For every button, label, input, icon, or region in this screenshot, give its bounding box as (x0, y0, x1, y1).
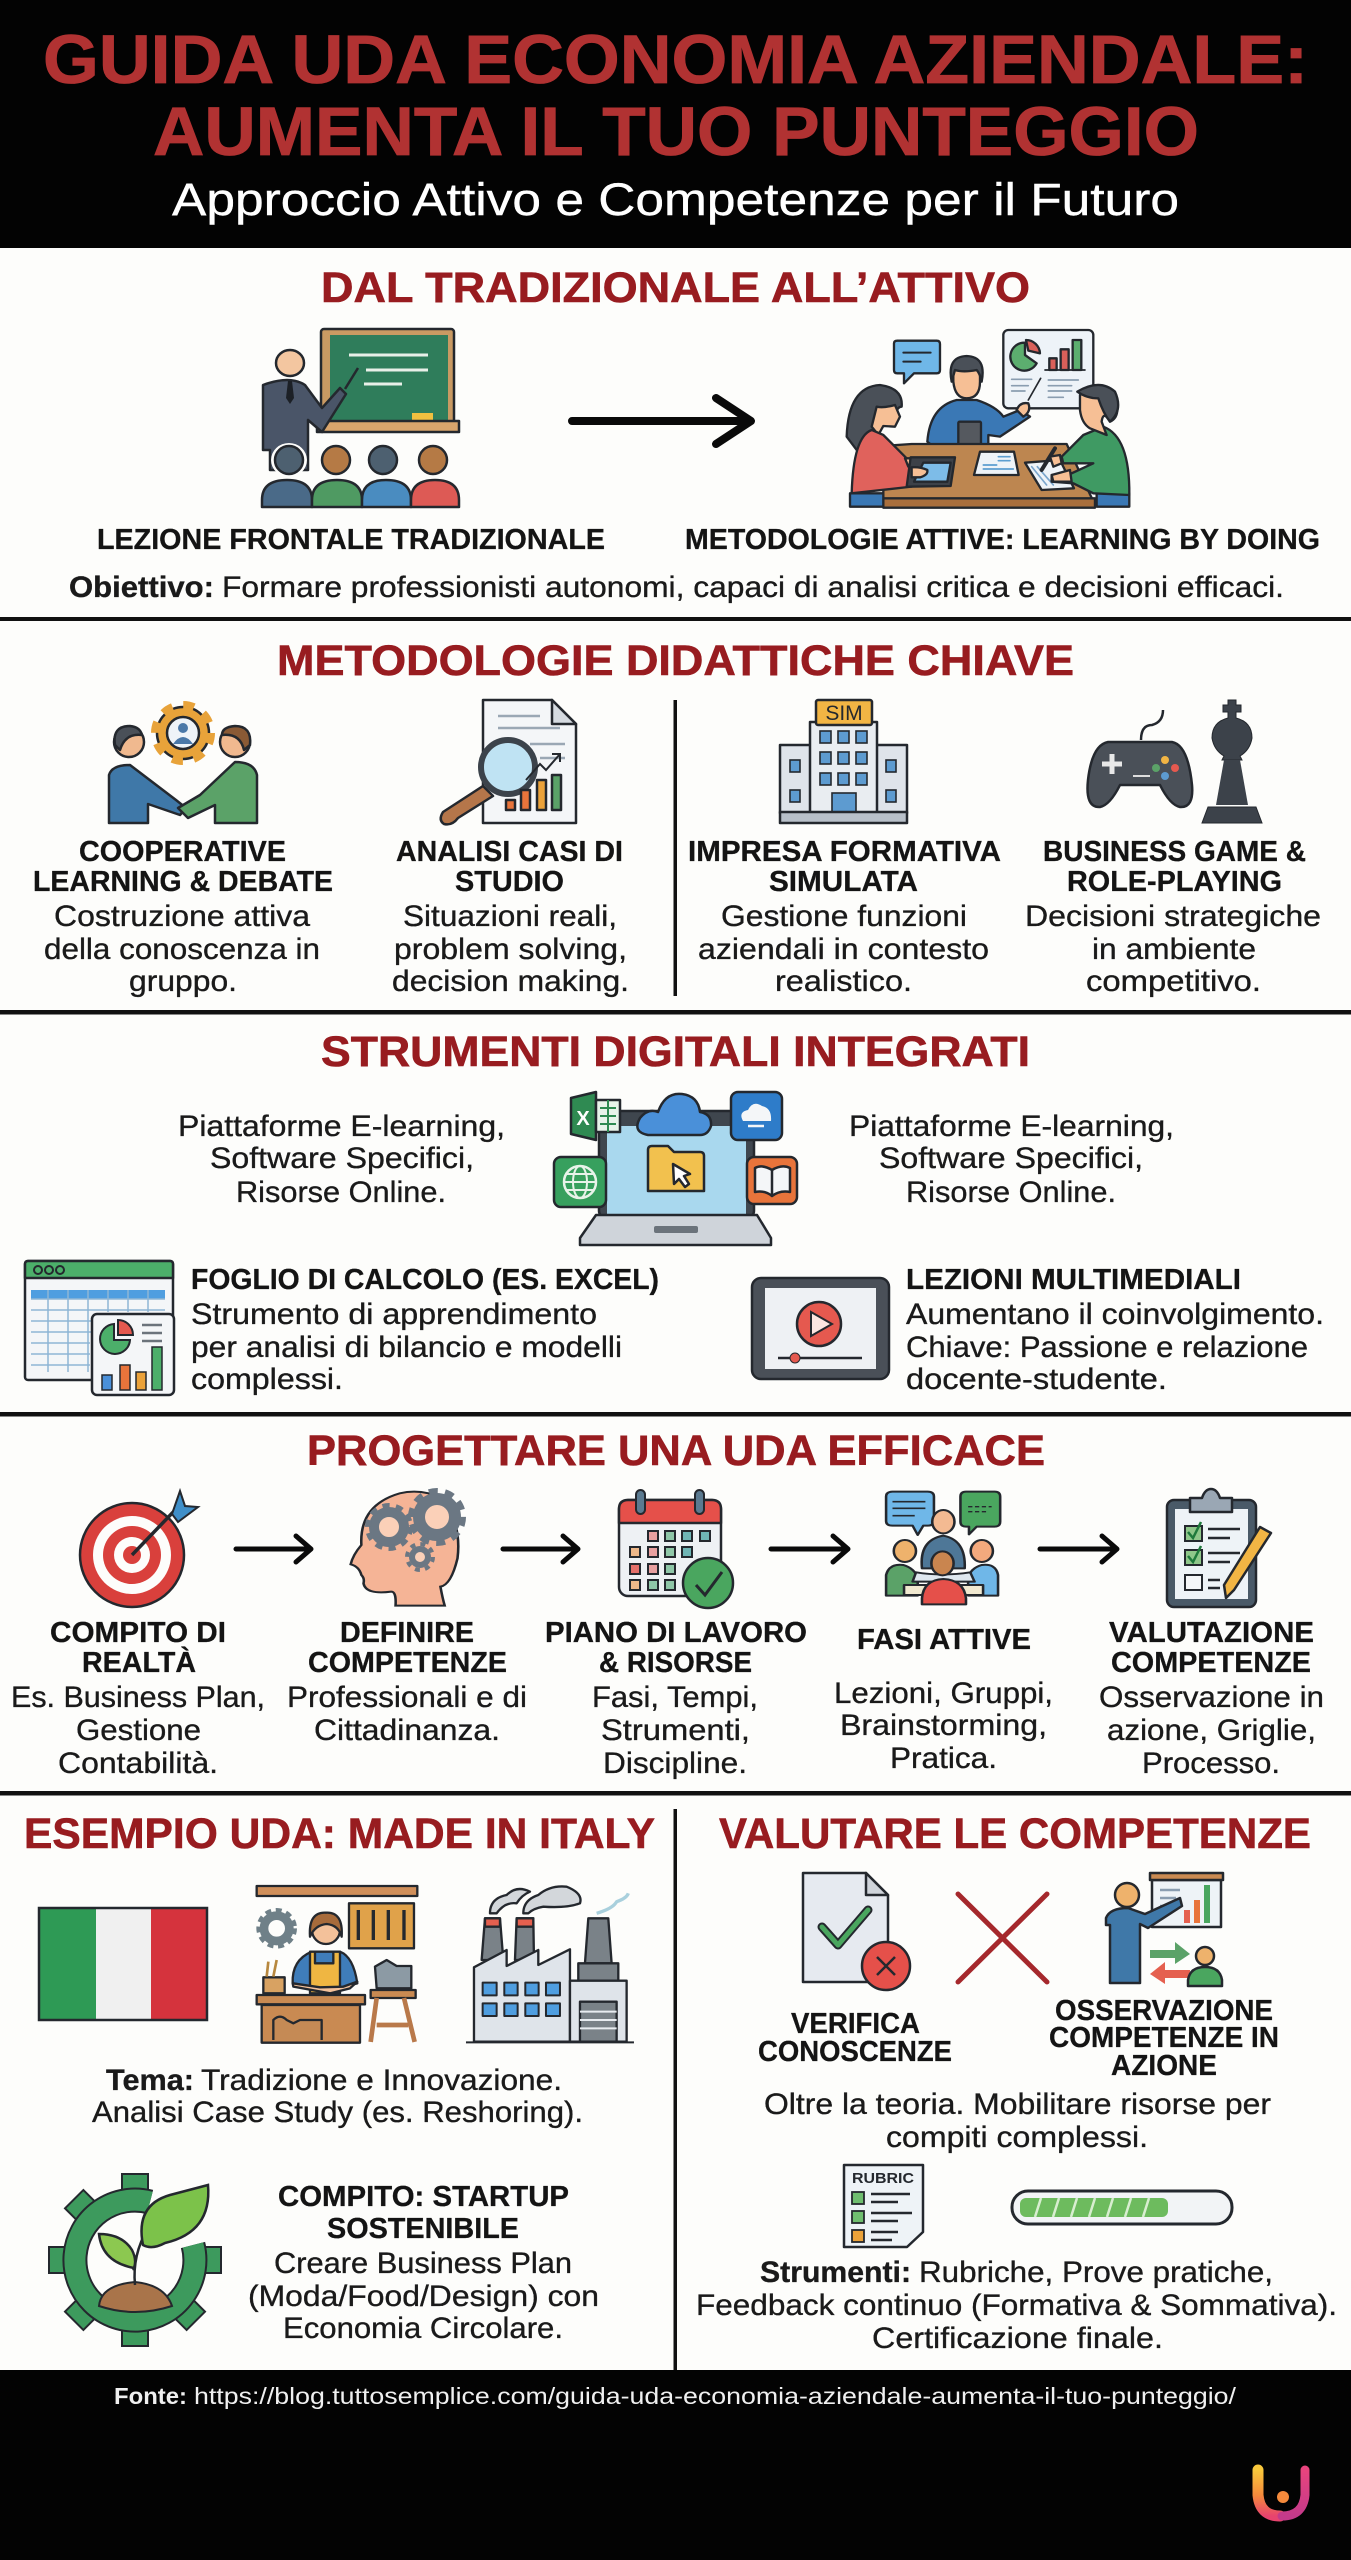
icon: traditional lecture (262, 329, 459, 507)
icon: progress bar (1012, 2191, 1232, 2224)
step: piano di lavoro: Strumenti, (601, 1714, 750, 1747)
icon: laptop with apps (554, 1092, 797, 1245)
text: compito startup (248, 2181, 599, 2345)
card: business game: BUSINESS GAME & (1043, 836, 1306, 868)
header panel (0, 0, 1351, 248)
step: piano di lavoro: & RISORSE (599, 1647, 752, 1679)
text: spreadsheet (191, 1264, 659, 1396)
panel: valutare le competenze (696, 1810, 1337, 2355)
icon: group discussion (886, 1492, 1000, 1604)
text: oltre la teoria: Oltre la teoria. Mobilitare risorse per (764, 2088, 1271, 2121)
step: fasi attive: Lezioni, Gruppi, (834, 1677, 1053, 1710)
source text: Fonte: (114, 2383, 187, 2409)
text: spreadsheet: complessi. (191, 1363, 343, 1396)
objective text: Formare professionisti autonomi, capaci di analisi critica e decisioni efficaci. (222, 571, 1284, 604)
step: compito di realtà: Es. Business Plan, (11, 1681, 265, 1714)
card: cooperative learning: della conoscenza in (44, 933, 320, 966)
card: analisi casi di studio: Situazioni reali, (403, 900, 617, 933)
card: impresa formativa simulata: realistico. (775, 965, 912, 998)
card: cooperative learning (33, 836, 333, 998)
step: piano di lavoro: PIANO DI LAVORO (545, 1617, 807, 1649)
step: fasi attive (834, 1624, 1053, 1775)
text: right platforms: Risorse Online. (906, 1176, 1116, 1209)
card: impresa formativa simulata (688, 836, 1001, 998)
text: compito startup: (Moda/Food/Design) con (248, 2280, 599, 2313)
icon: knowledge test (803, 1873, 910, 1990)
panel: progettare una uda efficace (11, 1427, 1324, 1780)
card: analisi casi di studio (392, 836, 629, 998)
text: multimedia lessons (906, 1264, 1324, 1396)
panel: dal tradizionale all'attivo (69, 264, 1320, 604)
card: analisi casi di studio: problem solving, (394, 933, 627, 966)
title: GUIDA UDA ECONOMIA AZIENDALE: (43, 21, 1308, 98)
step: fasi attive: Brainstorming, (840, 1709, 1047, 1742)
card: impresa formativa simulata: Gestione funzioni (721, 900, 967, 933)
step: piano di lavoro: Discipline. (603, 1747, 747, 1780)
icon: logo (1258, 2470, 1305, 2516)
step: piano di lavoro (545, 1617, 807, 1780)
label: active: METODOLOGIE ATTIVE: LEARNING BY DOING (685, 524, 1320, 556)
title (43, 21, 1308, 170)
text: right platforms: Piattaforme E-learning, (849, 1110, 1174, 1143)
text: multimedia lessons: LEZIONI MULTIMEDIALI (906, 1264, 1241, 1296)
card: business game (1025, 836, 1321, 998)
heading: ESEMPIO UDA: MADE IN ITALY (24, 1810, 655, 1858)
card: analisi casi di studio: ANALISI CASI DI (396, 836, 623, 868)
heading: METODOLOGIE DIDATTICHE CHIAVE (277, 637, 1074, 685)
text: strumenti (696, 2256, 1337, 2355)
icon: artisan workshop (257, 1886, 417, 2043)
arrow (236, 1536, 311, 1562)
heading: VALUTARE LE COMPETENZE (719, 1810, 1311, 1858)
panel: esempio uda made in italy (24, 1810, 655, 2346)
card: impresa formativa simulata: SIMULATA (769, 866, 918, 898)
label: osservazione competenze: OSSERVAZIONE (1055, 1995, 1273, 2027)
heading: DAL TRADIZIONALE ALL’ATTIVO (321, 264, 1030, 312)
step: definire competenze: Professionali e di (287, 1681, 527, 1714)
icon: italian flag (39, 1908, 207, 2020)
text: compito startup: COMPITO: STARTUP (278, 2181, 569, 2213)
card: cooperative learning: LEARNING & DEBATE (33, 866, 333, 898)
text: multimedia lessons: docente-studente. (906, 1363, 1167, 1396)
title: AUMENTA IL TUO PUNTEGGIO (153, 93, 1199, 170)
label: osservazione competenze (1049, 1995, 1279, 2082)
step: compito di realtà: REALTÀ (82, 1645, 196, 1679)
step: valutazione competenze: Processo. (1142, 1747, 1280, 1780)
icon: clipboard (1167, 1489, 1271, 1607)
icon: simulated company (780, 700, 907, 823)
text: tema: Tema: (106, 2064, 194, 2097)
text: right platforms: Software Specifici, (879, 1142, 1143, 1175)
label: verifica conoscenze: CONOSCENZE (758, 2036, 952, 2068)
text: tema: Tradizione e Innovazione. (201, 2064, 562, 2097)
card: business game: competitivo. (1086, 965, 1261, 998)
icon: rubric: RUBRIC (852, 2170, 914, 2187)
icon: calendar (619, 1490, 733, 1608)
divider (674, 700, 677, 996)
objective text: Obiettivo: (69, 571, 214, 604)
text: left platforms: Software Specifici, (210, 1142, 474, 1175)
card: cooperative learning: gruppo. (129, 965, 237, 998)
heading: PROGETTARE UNA UDA EFFICACE (307, 1427, 1045, 1475)
arrow (572, 398, 751, 444)
card: analisi casi di studio: decision making. (392, 965, 629, 998)
icon: factory (466, 1886, 634, 2042)
panel: strumenti digitali integrati (25, 1028, 1324, 1396)
icon: simulated company: SIM (825, 702, 863, 725)
footer (0, 2370, 1351, 2560)
text: left platforms (178, 1110, 505, 1209)
arrow (771, 1536, 848, 1562)
icon: competence observation (1106, 1873, 1223, 1986)
label: verifica conoscenze: VERIFICA (791, 2008, 920, 2040)
step: valutazione competenze: azione, Griglie, (1107, 1714, 1316, 1747)
step: fasi attive: Pratica. (890, 1742, 997, 1775)
step: definire competenze: DEFINIRE (340, 1617, 474, 1649)
label: verifica conoscenze (758, 2008, 952, 2068)
icon: handshake and gear (109, 705, 257, 823)
step: valutazione competenze: COMPETENZE (1111, 1647, 1311, 1679)
step: valutazione competenze: Osservazione in (1099, 1681, 1324, 1714)
card: impresa formativa simulata: IMPRESA FORMATIVA (688, 836, 1001, 868)
arrow (1040, 1536, 1117, 1562)
icon: plant in gear (49, 2174, 221, 2346)
text: compito startup: Creare Business Plan (274, 2247, 572, 2280)
step: definire competenze (287, 1617, 527, 1747)
card: business game: in ambiente (1092, 933, 1256, 966)
subtitle: Approccio Attivo e Competenze per il Futuro (172, 174, 1179, 225)
arrow (503, 1536, 578, 1562)
panel: metodologie didattiche chiave (33, 637, 1321, 998)
icon: multimedia tablet (752, 1278, 889, 1379)
text: compito startup: SOSTENIBILE (327, 2213, 519, 2245)
text: strumenti: Strumenti: (760, 2256, 911, 2289)
icon: controller and chess king (1088, 700, 1262, 823)
text: multimedia lessons: Chiave: Passione e relazione (906, 1331, 1308, 1364)
step: compito di realtà: COMPITO DI (50, 1617, 226, 1649)
step: definire competenze: Cittadinanza. (314, 1714, 500, 1747)
icon: case study (441, 700, 576, 824)
icon: cross (958, 1894, 1047, 1982)
card: impresa formativa simulata: aziendali in contesto (698, 933, 989, 966)
label: osservazione competenze: AZIONE (1111, 2050, 1217, 2082)
step: compito di realtà: Gestione (76, 1714, 201, 1747)
icon: head with gears (351, 1491, 463, 1606)
text: oltre la teoria: compiti complessi. (886, 2121, 1148, 2154)
text: spreadsheet: Strumento di apprendimento (191, 1298, 597, 1331)
icon: rubric (844, 2165, 923, 2247)
text: multimedia lessons: Aumentano il coinvolgimento. (906, 1298, 1324, 1331)
card: cooperative learning: COOPERATIVE (79, 836, 286, 868)
icon: spreadsheet (25, 1261, 174, 1395)
text: left platforms: Piattaforme E-learning, (178, 1110, 505, 1143)
heading: STRUMENTI DIGITALI INTEGRATI (321, 1028, 1030, 1076)
icon: active learning group (847, 330, 1129, 508)
step: definire competenze: COMPETENZE (308, 1647, 507, 1679)
label: traditional: LEZIONE FRONTALE TRADIZIONALE (97, 524, 605, 556)
icon: target (80, 1491, 198, 1607)
card: business game: ROLE-PLAYING (1067, 866, 1282, 898)
label: osservazione competenze: COMPETENZE IN (1049, 2022, 1279, 2054)
step: valutazione competenze: VALUTAZIONE (1109, 1617, 1314, 1649)
text: tema: Analisi Case Study (es. Reshoring). (92, 2096, 583, 2129)
step: compito di realtà: Contabilità. (58, 1747, 218, 1780)
text: tema (92, 2064, 583, 2129)
text: strumenti: Certificazione finale. (872, 2322, 1163, 2355)
text: left platforms: Risorse Online. (236, 1176, 446, 1209)
step: piano di lavoro: Fasi, Tempi, (592, 1681, 758, 1714)
text: strumenti: Rubriche, Prove pratiche, (919, 2256, 1273, 2289)
card: analisi casi di studio: STUDIO (455, 866, 564, 898)
card: cooperative learning: Costruzione attiva (54, 900, 310, 933)
step: valutazione competenze (1099, 1617, 1324, 1780)
step: compito di realtà (11, 1617, 265, 1780)
icon: laptop with apps: X (576, 1108, 590, 1130)
text: spreadsheet: FOGLIO DI CALCOLO (ES. EXCEL) (191, 1264, 659, 1296)
text: oltre la teoria (764, 2088, 1271, 2154)
text: compito startup: Economia Circolare. (283, 2312, 563, 2345)
text: strumenti: Feedback continuo (Formativa & Sommativa). (696, 2289, 1337, 2322)
text: spreadsheet: per analisi di bilancio e modelli (191, 1331, 622, 1364)
text: right platforms (849, 1110, 1174, 1209)
card: business game: Decisioni strategiche (1025, 900, 1321, 933)
source text: https://blog.tuttosemplice.com/guida-uda-economia-aziendale-aumenta-il-tuo-punteggio/ (194, 2383, 1237, 2409)
step: fasi attive: FASI ATTIVE (857, 1624, 1031, 1656)
